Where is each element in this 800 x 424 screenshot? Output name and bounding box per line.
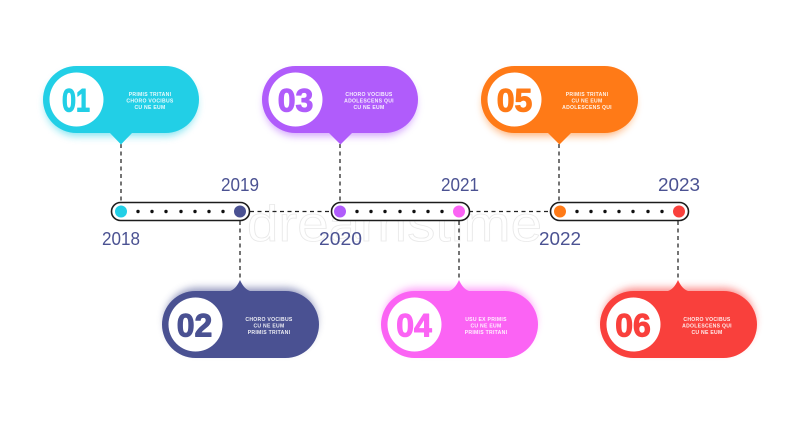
panel: 01: CU NE EUM bbox=[134, 105, 166, 111]
panel: 02 bbox=[162, 280, 319, 358]
panel: 03: 03 bbox=[278, 82, 313, 118]
panel: 06: CU NE EUM bbox=[691, 330, 723, 336]
panel: 01 bbox=[43, 66, 199, 144]
panel: 06: CHORO VOCIBUS bbox=[683, 317, 731, 323]
year labels: 2022 bbox=[539, 229, 581, 249]
panel: 05: ADOLESCENS QUI bbox=[562, 105, 612, 111]
panel: 04: PRIMIS TRITANI bbox=[465, 330, 508, 336]
panel: 03 bbox=[262, 66, 418, 144]
timeline segment: 2020-2021 bbox=[332, 202, 470, 220]
panel: 02: PRIMIS TRITANI bbox=[248, 330, 291, 336]
panel: 04: 04 bbox=[396, 308, 432, 344]
year labels: 2019 bbox=[221, 175, 259, 195]
panel: 03: ADOLESCENS QUI bbox=[344, 98, 394, 104]
timeline segment: 2022-2023 bbox=[550, 202, 688, 220]
panel: 06: 06 bbox=[615, 308, 651, 344]
panel: 05: 05 bbox=[497, 82, 532, 118]
timeline connectors bbox=[121, 144, 678, 280]
panel: 04: USU EX PRIMIS bbox=[465, 317, 507, 323]
panel: 04: CU NE EUM bbox=[470, 324, 502, 330]
panel: 04 bbox=[381, 280, 538, 358]
timeline segment: 2018-2019 bbox=[112, 202, 250, 220]
panel: 02: 02 bbox=[177, 308, 212, 344]
panel: 06 bbox=[600, 280, 757, 358]
year labels: 2021 bbox=[441, 175, 479, 195]
year labels bbox=[102, 175, 700, 249]
panel: 01: PRIMIS TRITANI bbox=[129, 92, 172, 98]
year labels: 2018 bbox=[102, 229, 140, 249]
panel: 02: CHORO VOCIBUS bbox=[245, 317, 293, 323]
panel: 03: CHORO VOCIBUS bbox=[345, 92, 393, 98]
watermark: dreamstime bbox=[247, 196, 542, 252]
panel: 03: CU NE EUM bbox=[353, 105, 385, 111]
year labels: 2023 bbox=[658, 175, 700, 195]
panel: 05: CU NE EUM bbox=[571, 98, 603, 104]
year labels: 2020 bbox=[319, 229, 362, 249]
panel: 06: ADOLESCENS QUI bbox=[682, 324, 732, 330]
panel: 01: 01 bbox=[62, 82, 90, 118]
panel: 05 bbox=[481, 66, 638, 144]
panel: 02: CU NE EUM bbox=[253, 324, 285, 330]
panel: 01: CHORO VOCIBUS bbox=[126, 98, 174, 104]
panel: 05: PRIMIS TRITANI bbox=[566, 92, 609, 98]
